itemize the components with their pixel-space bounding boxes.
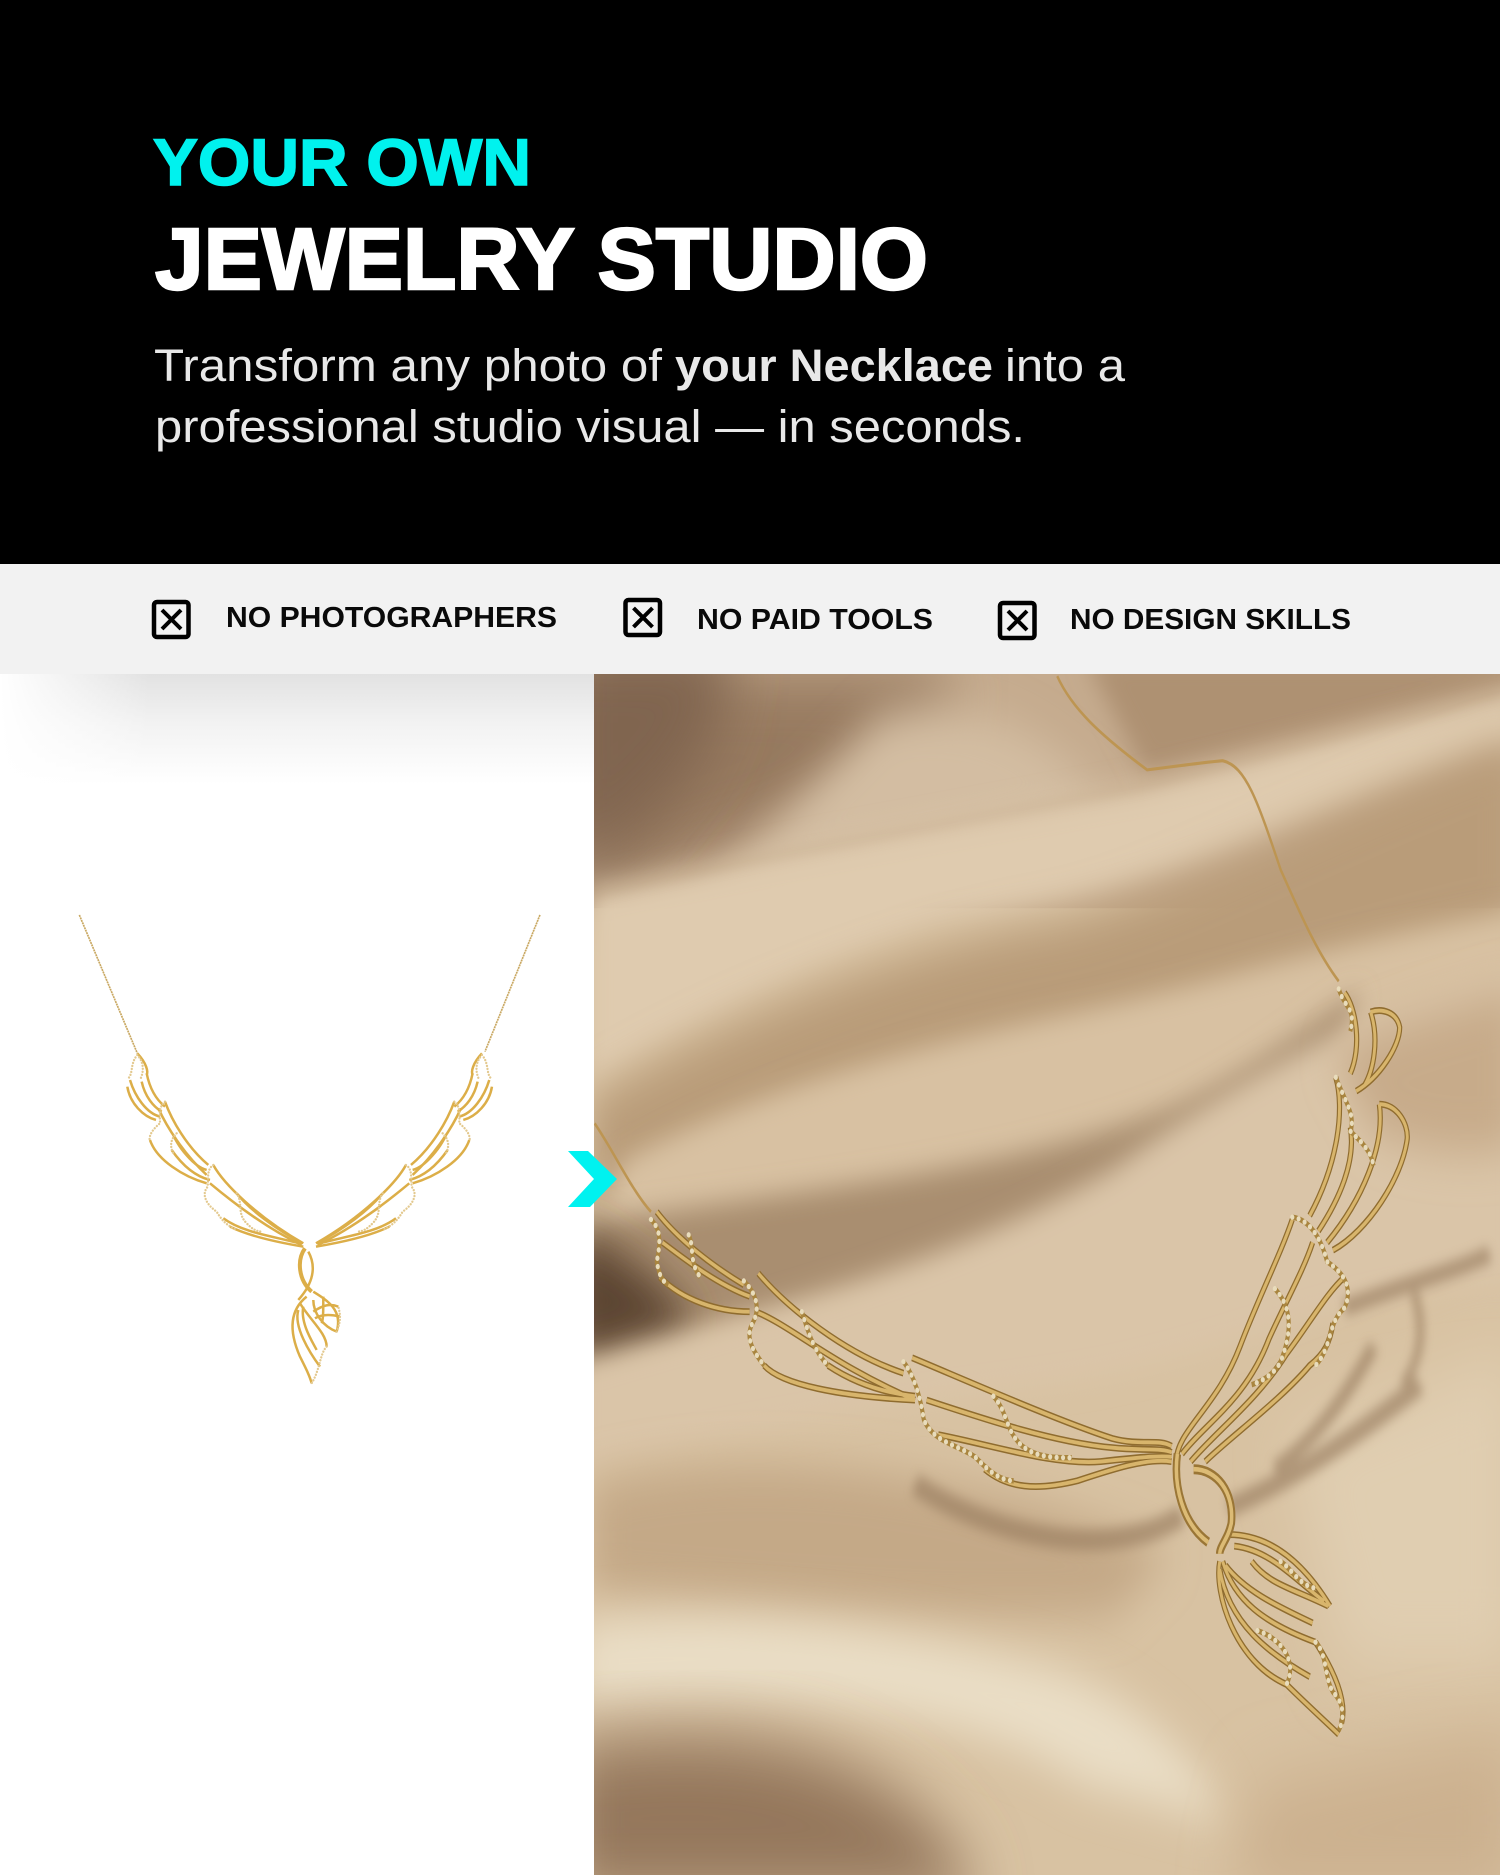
benefit: no photographers xyxy=(154,602,557,637)
subtitle xyxy=(154,340,1126,452)
icon: crossed box xyxy=(154,602,188,637)
right panel: studio photo on satin xyxy=(555,639,1500,1875)
necklace cast shadow xyxy=(915,1254,1490,1540)
necklace on satin xyxy=(595,676,1407,1734)
label: NO PAID TOOLS xyxy=(697,604,933,636)
subtitle: Transform any photo of xyxy=(154,340,663,391)
subtitle: into a xyxy=(1005,340,1126,391)
chevron arrow xyxy=(568,1151,617,1207)
left panel: original product photo xyxy=(0,674,594,1875)
necklace cutout xyxy=(79,915,540,1383)
benefit: no design skills xyxy=(1000,603,1351,638)
subtitle: professional studio visual — in seconds. xyxy=(155,401,1025,452)
icon: crossed box xyxy=(1000,603,1034,638)
satin fabric xyxy=(555,639,1500,1875)
benefits band xyxy=(0,564,1500,674)
label: NO PHOTOGRAPHERS xyxy=(226,602,557,634)
title line: YOUR OWN: YOUR OWN xyxy=(153,125,531,199)
title line: JEWELRY STUDIO: JEWELRY STUDIO xyxy=(155,211,928,308)
icon: crossed box xyxy=(626,600,660,635)
subtitle: your Necklace xyxy=(675,340,993,391)
header panel xyxy=(0,0,1500,564)
label: NO DESIGN SKILLS xyxy=(1070,604,1351,636)
benefit: no paid tools xyxy=(626,600,933,636)
